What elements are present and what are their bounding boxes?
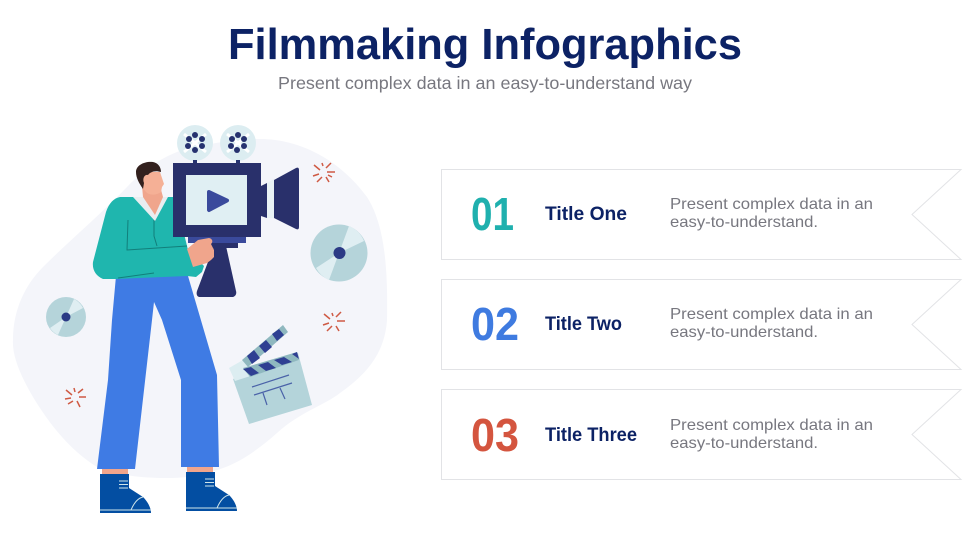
panel: item three xyxy=(442,390,961,480)
icon: spark top right xyxy=(313,163,335,182)
body xyxy=(173,163,261,237)
head xyxy=(136,162,164,195)
text block: easy-to-understand. xyxy=(670,435,818,452)
banner shape xyxy=(442,170,961,260)
text block: Present complex data in an xyxy=(670,306,873,323)
icon: small disc xyxy=(46,297,86,337)
right boot xyxy=(186,467,237,511)
sweater xyxy=(93,186,204,279)
text block: easy-to-understand. xyxy=(670,214,818,231)
play icon xyxy=(209,192,227,210)
number: 03 xyxy=(471,409,519,461)
panel: item two xyxy=(442,280,961,370)
number: 02 xyxy=(471,298,519,350)
icon: spark middle right xyxy=(323,312,345,331)
text block: Present complex data in an xyxy=(670,196,873,213)
number: 01 xyxy=(471,188,514,240)
subtitle: Present complex data in an easy-to-understand way xyxy=(278,73,692,93)
neck xyxy=(142,186,163,215)
lens xyxy=(261,183,267,218)
icon: large disc xyxy=(310,224,368,282)
illustration: filmmaker with camera xyxy=(13,125,387,513)
background blob xyxy=(13,139,387,478)
screen xyxy=(186,175,247,225)
left boot xyxy=(100,469,151,513)
text block: easy-to-understand. xyxy=(670,324,818,341)
title: Filmmaking Infographics xyxy=(228,20,742,69)
heading: Title One xyxy=(545,203,627,225)
reels xyxy=(177,125,256,164)
heading: Title Two xyxy=(545,313,622,335)
trousers xyxy=(97,276,219,469)
icon: spark lower left xyxy=(65,388,86,407)
banner shape xyxy=(442,390,961,480)
banner shape xyxy=(442,280,961,370)
clapperboard xyxy=(229,325,312,424)
heading: Title Three xyxy=(545,424,637,446)
hand xyxy=(187,238,214,267)
film camera xyxy=(173,125,299,297)
collar xyxy=(133,197,168,221)
text block: Present complex data in an xyxy=(670,417,873,434)
handle xyxy=(197,246,236,297)
panel: item one xyxy=(442,170,961,260)
